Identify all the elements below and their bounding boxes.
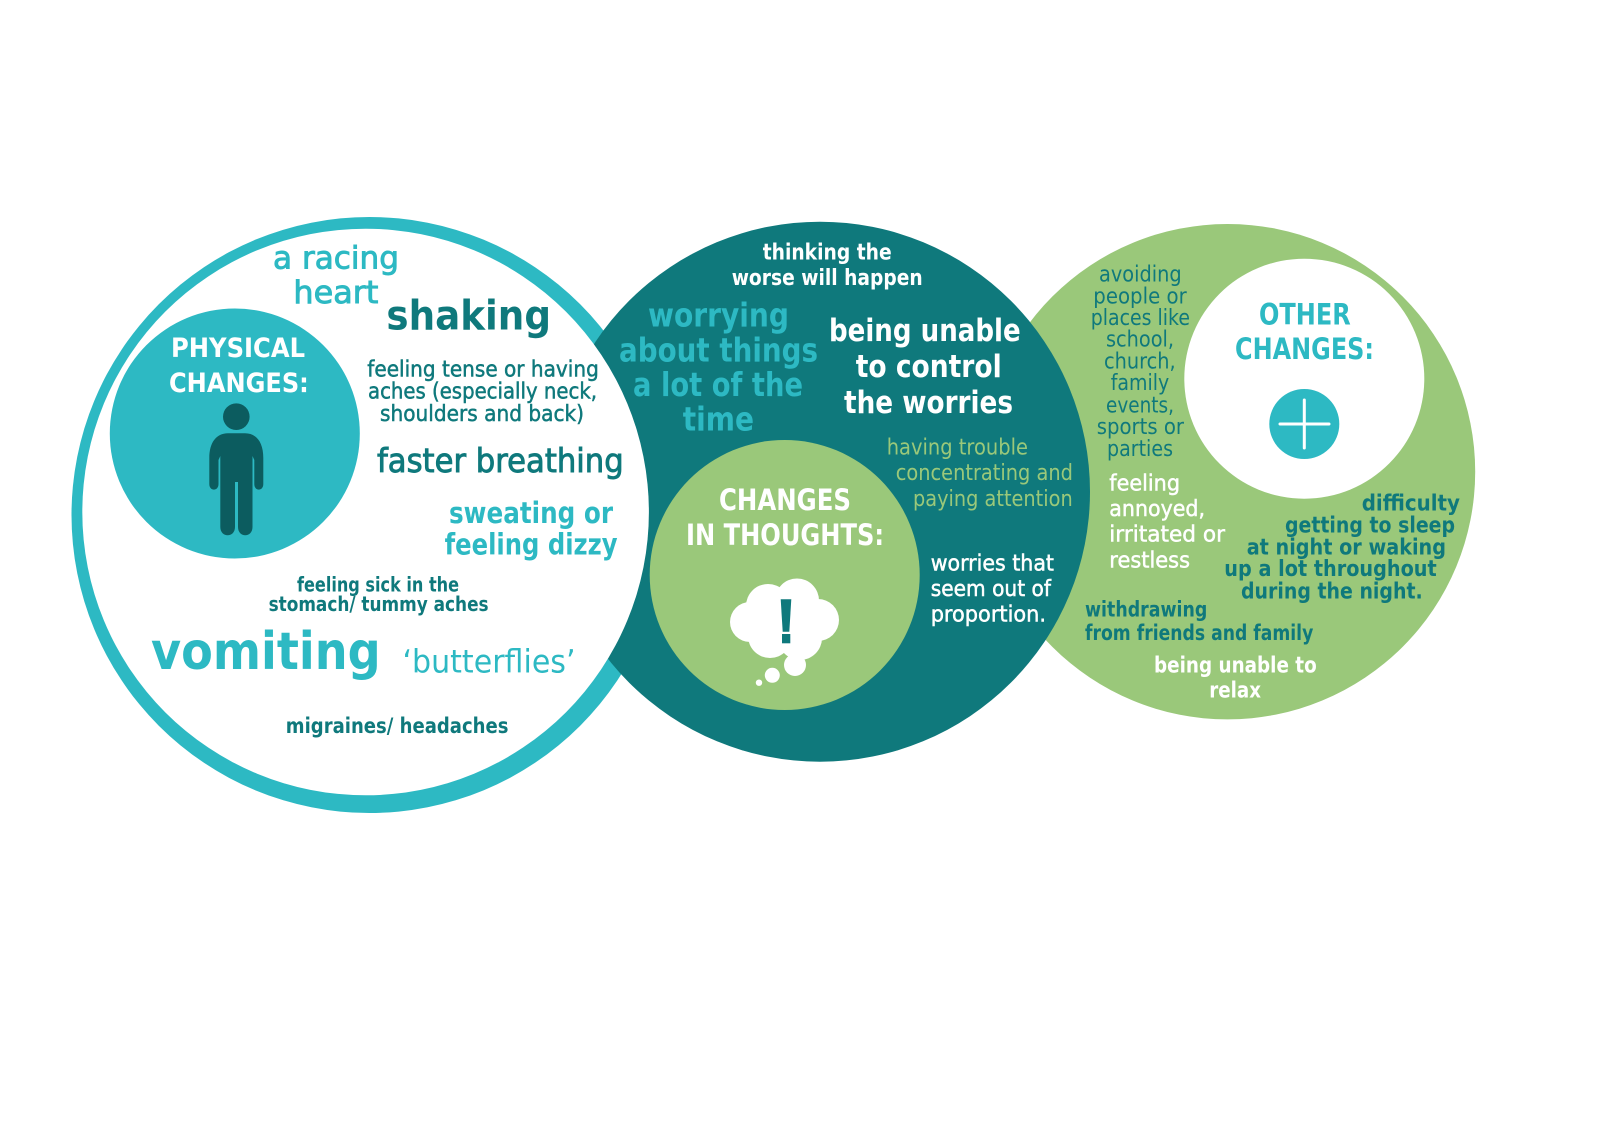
text: thinking the worse: worse will happen <box>732 266 923 291</box>
text: feeling sick: feeling sick in the <box>297 573 459 597</box>
text: difficulty sleeping <box>1224 492 1460 604</box>
text: feeling tense: shoulders and back) <box>380 402 584 427</box>
text: feeling tense <box>367 358 599 427</box>
text: sweating or feeling dizzy: feeling dizzy <box>445 527 618 561</box>
text: difficulty sleeping: during the night. <box>1241 579 1423 604</box>
text: worries out of proportion <box>931 551 1054 628</box>
text: feeling annoyed: annoyed, <box>1109 497 1205 522</box>
text: being unable to control: being unable <box>829 313 1021 349</box>
text: withdrawing <box>1085 598 1314 645</box>
heading: other changes: OTHER <box>1259 297 1351 331</box>
text: having trouble: concentrating and <box>896 461 1073 486</box>
heading: changes in thoughts: IN THOUGHTS: <box>686 518 884 552</box>
text: feeling annoyed: feeling <box>1109 472 1180 497</box>
text: worrying about things: a lot of the <box>633 365 803 404</box>
text: avoiding people or places: family <box>1111 371 1169 396</box>
text: being unable to control <box>829 313 1021 421</box>
text: avoiding people or places: avoiding <box>1099 263 1182 288</box>
text: a racing heart: heart <box>293 275 378 311</box>
text: sweating or feeling dizzy <box>445 496 618 561</box>
text: withdrawing: withdrawing <box>1085 598 1207 622</box>
text: sweating or feeling dizzy: sweating or <box>449 496 614 530</box>
text: worries out of proportion: worries that <box>931 551 1054 576</box>
text: worrying about things: time <box>683 399 754 438</box>
text: having trouble: having trouble <box>887 436 1028 461</box>
text: withdrawing: from friends and family <box>1085 621 1314 645</box>
panel: physical changes <box>82 229 649 795</box>
text: feeling tense: aches (especially neck, <box>368 380 597 405</box>
heading: physical changes: PHYSICAL <box>171 333 305 364</box>
white circle <box>82 229 649 795</box>
text: worrying about things: about things <box>619 330 818 369</box>
text: feeling tense: feeling tense or having <box>367 358 599 383</box>
text: being unable to control: the worries <box>844 385 1013 421</box>
text: butterflies: ‘butterflies’ <box>402 642 576 680</box>
text: difficulty sleeping: up a lot throughout <box>1224 557 1437 582</box>
text: difficulty sleeping: at night or waking <box>1247 535 1446 560</box>
text: a racing heart <box>273 240 399 311</box>
text: worrying about things: worrying <box>648 296 789 335</box>
text: avoiding people or places: school, <box>1106 328 1174 353</box>
text: avoiding people or places <box>1091 263 1190 462</box>
text: avoiding people or places: events, <box>1106 393 1174 418</box>
text: avoiding people or places: parties <box>1107 437 1173 462</box>
dark circle <box>550 222 1090 762</box>
heading: changes in thoughts <box>686 483 884 552</box>
text: being unable to relax: relax <box>1209 679 1261 704</box>
text: thinking the worse: thinking the <box>763 241 892 266</box>
heading: other changes <box>1235 297 1374 366</box>
text: worries out of proportion: proportion. <box>931 603 1046 628</box>
green heading circle <box>650 440 920 710</box>
text: avoiding people or places: places like <box>1091 306 1190 331</box>
text: having trouble <box>887 436 1073 512</box>
text: avoiding people or places: sports or <box>1097 415 1185 440</box>
heading: changes in thoughts: CHANGES <box>719 483 851 517</box>
text: being unable to relax <box>1154 654 1317 704</box>
text: thinking the worse <box>732 241 923 291</box>
panel: thoughts contents <box>619 241 1073 710</box>
text: feeling annoyed: irritated or <box>1109 523 1226 548</box>
text: worrying about things <box>619 296 818 438</box>
text: feeling sick <box>269 573 489 616</box>
white heading circle <box>1184 259 1424 499</box>
teal heading circle <box>110 308 360 558</box>
text: migraines: migraines/ headaches <box>286 714 508 738</box>
icon: thought cloud <box>730 578 839 686</box>
text: avoiding people or places: people or <box>1093 284 1188 309</box>
panel: other changes <box>980 224 1475 719</box>
text: being unable to control: to control <box>856 349 1002 385</box>
panel: changes in thoughts <box>550 222 1090 762</box>
icon: person <box>209 403 263 535</box>
text: avoiding people or places: church, <box>1104 350 1176 375</box>
text: difficulty sleeping: getting to sleep <box>1285 514 1455 539</box>
heading: physical changes: CHANGES: <box>169 368 309 399</box>
text: feeling annoyed <box>1109 472 1226 573</box>
text: being unable to relax: being unable to <box>1154 654 1317 679</box>
text: worries out of proportion: seem out of <box>931 577 1052 602</box>
text: feeling annoyed: restless <box>1109 548 1190 573</box>
text: a racing heart: a racing <box>273 240 399 276</box>
heading: physical changes <box>169 333 309 399</box>
panel: physical ring <box>72 217 668 813</box>
text: faster breathing: faster breathing <box>377 441 624 480</box>
text: feeling sick: stomach/ tummy aches <box>269 592 489 616</box>
heading: other changes: CHANGES: <box>1235 332 1374 366</box>
text: shaking: shaking <box>386 292 551 340</box>
green circle <box>980 224 1475 719</box>
text: having trouble: paying attention <box>913 487 1073 512</box>
text: vomiting: vomiting <box>151 622 381 682</box>
text: difficulty sleeping: difficulty <box>1362 492 1460 517</box>
icon: plus <box>1269 389 1339 459</box>
